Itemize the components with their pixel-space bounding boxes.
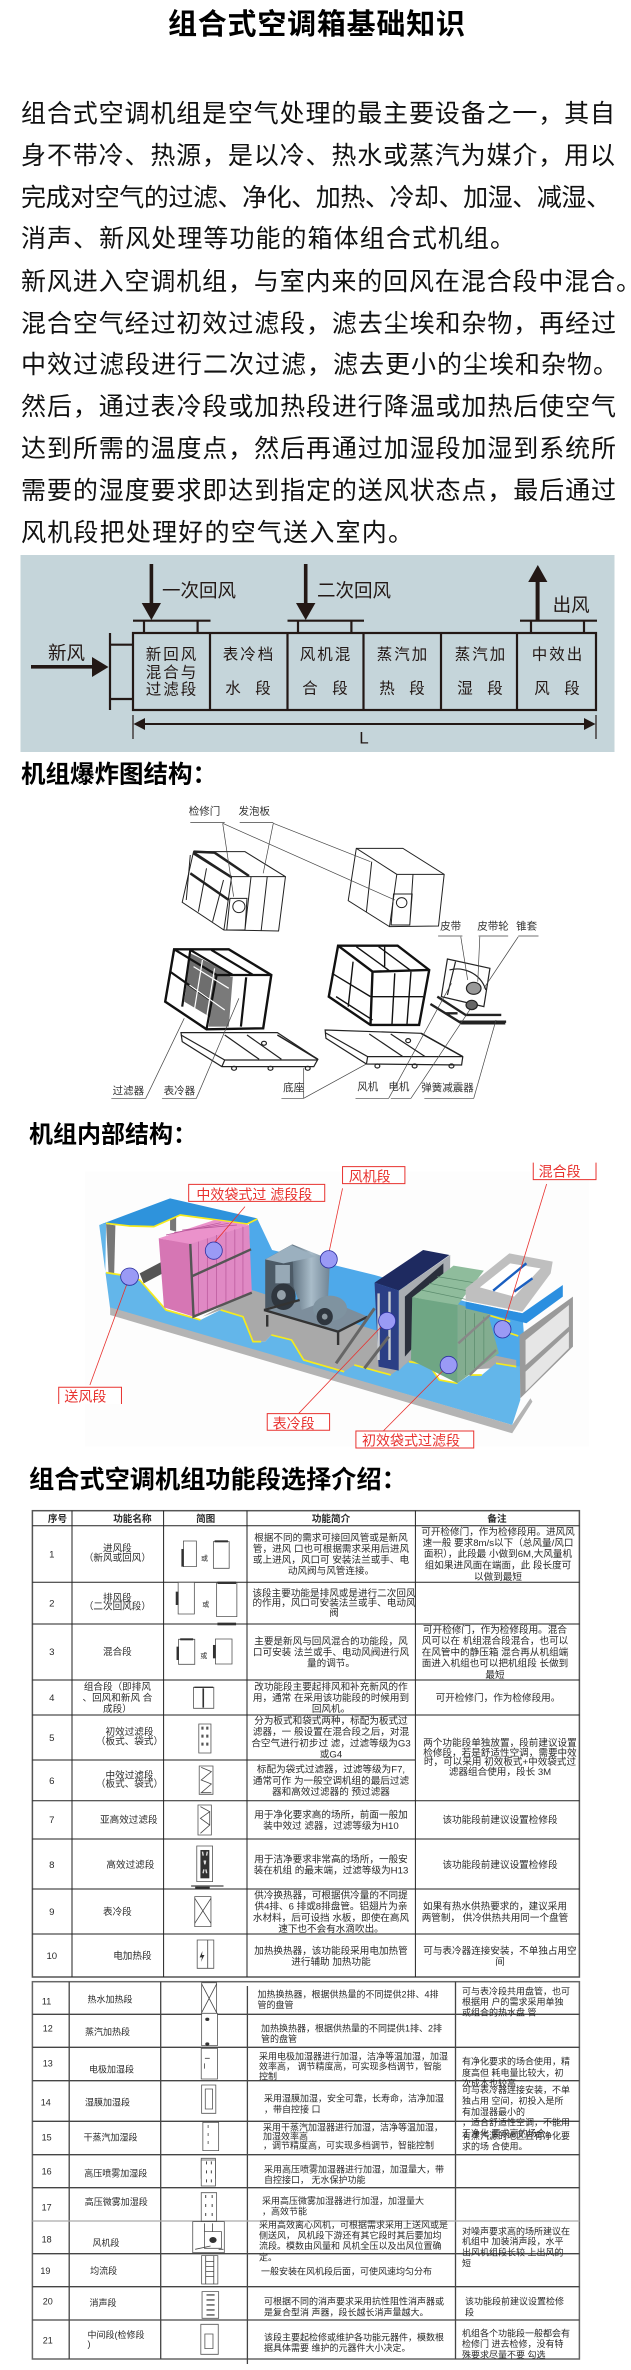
table text rows: 7 [49, 1815, 54, 1826]
panel: air handling section flow diagram: 二次回风 [317, 580, 391, 601]
table text rows: 是复合型消 声器，段长越长消声量越大。 [264, 2307, 429, 2318]
table text rows: 量的调节。 [307, 1658, 355, 1670]
table text rows: 滤器组合使用，段长 3M [449, 1766, 551, 1778]
table text rows: 出风机组段长较 上出风的 [462, 2247, 564, 2258]
table text rows: 采用干蒸汽加湿器进行加湿，洁净等温加湿， [263, 2122, 443, 2133]
diagram: internal structure cutaway [59, 1163, 596, 1449]
table text rows: 2 [49, 1598, 54, 1610]
table icons [201, 1983, 219, 2178]
table text rows: 求的场 合使用。 [462, 2141, 528, 2152]
table text rows: 控制 [259, 2071, 277, 2082]
base: left [181, 1033, 318, 1070]
diagram: exploded view of the unit: 发泡板 [239, 805, 271, 818]
rear left post [106, 1224, 115, 1273]
table text rows [40, 1986, 570, 2360]
table text rows: 3 [49, 1647, 54, 1658]
table text rows: 改功能段主要起排风和补充新风的作 [254, 1681, 408, 1693]
table text rows: 采用高压喷雾加湿器进行加湿，加湿量大，带 [264, 2163, 444, 2174]
diagram: internal structure cutaway: 送风段 [64, 1389, 106, 1405]
mixing section top [466, 1253, 563, 1323]
table text rows: 18 [42, 2234, 52, 2244]
table text rows: 或 [201, 1554, 208, 1562]
table text rows: 阀 [329, 1607, 339, 1619]
table text rows: 21 [43, 2335, 53, 2345]
table text rows: 器和高效过滤器的 预过滤器 [272, 1786, 390, 1798]
table text rows: 对噪声要求高的场所建议在 [462, 2225, 570, 2236]
table text rows: 间 [495, 1956, 505, 1968]
table text rows: 检修段，若是舒适性空调，需要中效 [423, 1747, 577, 1759]
text block: introduction: 组合式空调机组是空气处理的最主要设备之一，其自 [21, 100, 615, 128]
panel: air handling section flow diagram: 中效出 [532, 646, 584, 664]
text block: introduction: 然后，通过表冷段或加热段进行降温或加热后使空气 [21, 393, 616, 421]
fan section [263, 1244, 368, 1345]
green filter [411, 1266, 499, 1383]
table text rows: 采用电极加湿器进行加湿，洁净等温加湿，加湿 [259, 2050, 448, 2061]
table text rows: 功能简介 [312, 1513, 351, 1525]
table text rows: 标配为袋式过滤器，过滤等级为F7, [257, 1764, 405, 1776]
table text rows: 4 [49, 1693, 55, 1704]
table text rows: ，带自控接 口 [264, 2103, 321, 2114]
table text rows: 风机段 [92, 2237, 120, 2248]
table text rows: 供冷换热器，可根据供冷量的不同提 [254, 1890, 408, 1902]
table text rows: 最短 [485, 1669, 505, 1681]
text block: introduction: 消声、新风处理等功能的箱体组合式机组。 [21, 225, 515, 253]
table text rows: 面进入机组也可以把机组段 长做到 [422, 1658, 568, 1670]
diagram: internal structure cutaway: 中效袋式过 滤段段 [196, 1186, 312, 1202]
diagram: internal structure cutaway: 表冷段 [273, 1415, 315, 1431]
table text rows: ，适合舒适性空调，不能用 [462, 2117, 570, 2128]
table text rows: ，高效节能 [262, 2205, 307, 2216]
heading: internal structure: 机组内部结构： [29, 1122, 197, 1148]
table text rows: 机组各个功能段一般都会有 [462, 2327, 570, 2338]
leader lines [111, 823, 539, 1098]
table text rows: 面积），此段最 小做到6M,大风量机 [424, 1548, 572, 1560]
table text rows: 根据用 户的需求采用单独 [462, 1996, 564, 2007]
table text rows: 可根据不同的消声要求采用抗性阻性消声器或 [264, 2296, 444, 2307]
diagram: exploded view of the unit: 弹簧减震器 [421, 1081, 474, 1094]
dimension line L [133, 715, 596, 739]
text block: introduction: 完成对空气的过滤、净化、加热、冷却、加湿、减湿、 [21, 184, 611, 212]
table text rows: 或G4 [320, 1748, 343, 1760]
back wall and floor [202, 1218, 526, 1375]
fan assembly [430, 959, 506, 1023]
table text rows: 亚高效过滤段 [100, 1814, 158, 1826]
table text rows: 20 [43, 2297, 53, 2307]
table text rows: 加热换热器，根据供热量的不同提供1排、2排 [261, 2022, 442, 2033]
table text rows: 根据不同的需求可接回风管或是新风 [254, 1532, 408, 1544]
table text rows: 用，通常 在采用该功能段的时候用到 [253, 1692, 409, 1704]
panel: air handling section flow diagram: 蒸汽加 [377, 646, 429, 664]
table text rows: 高效过滤段 [106, 1859, 155, 1871]
table text rows: 供4排、6 排或8排盘管。铝翅片为亲 [255, 1900, 407, 1912]
table text rows: 侧送风， 风机段下游还有其它段时其后要加均 [259, 2229, 442, 2240]
table text rows: 自控接口， 无水保护功能 [264, 2174, 366, 2185]
table text rows: 装中效过 滤器，过滤等级为H10 [263, 1820, 399, 1832]
table text rows: 流段。模数由风量和 风机全压以及出风位置确 [259, 2240, 442, 2251]
text block: introduction: 达到所需的温度点，然后再通过加湿段加湿到系统所 [21, 435, 616, 463]
table text rows: 16 [42, 2167, 52, 2177]
table grid [32, 1982, 579, 2364]
diagram: exploded view of the unit: 皮带 [440, 920, 461, 933]
table text rows: 10 [46, 1951, 57, 1962]
pink filter [159, 1220, 252, 1317]
table text rows: 的作用，风口可安装法兰或手、电动风 [252, 1597, 416, 1609]
table text rows: 该功能段前建议设置检修段 [442, 1814, 558, 1826]
arrow: first return air [142, 564, 161, 620]
table text rows: 在风管中的静压箱 混合再从机组端 [422, 1646, 569, 1658]
table text rows: 殊要求尽量不要 勾选 [462, 2349, 546, 2360]
table text rows: 动风阀与风管连接。 [288, 1565, 374, 1577]
red leader lines [90, 1184, 547, 1432]
table text rows: 该段主要起检修或维护各功能元器件，模数根 [264, 2332, 444, 2343]
table text rows: 成段） [103, 1703, 132, 1715]
table text rows: 蒸汽加热段 [85, 2026, 130, 2037]
table text rows: 机组中 加装消声段，水平 [462, 2236, 564, 2247]
table text rows: 中间段(检修段 [88, 2329, 144, 2340]
table text rows: 速下也不会有水滴吹出。 [278, 1923, 384, 1935]
table text rows: 有加湿器最小的 [462, 2106, 525, 2117]
table text rows: 排风段 [103, 1592, 132, 1604]
table text rows: 管，进风 口也可根据需求采用后进风 [253, 1543, 409, 1555]
diagram: exploded view of the unit: 检修门 [189, 805, 220, 818]
table text rows: 速一般 要求8m/s以下（总风量/风口 [423, 1537, 573, 1549]
table text rows: 表冷段 [103, 1906, 132, 1918]
table text rows: 口可安装 法兰或手、电动风阀进行风 [253, 1646, 409, 1658]
table text rows: 19 [40, 2266, 50, 2276]
table text rows: 度高但 耗电量比较大，初 [462, 2067, 564, 2078]
panel: air handling section flow diagram: 新风 [48, 642, 85, 664]
table text rows: 管的盘管 [258, 1999, 294, 2010]
table text rows: 高压微雾加湿段 [85, 2196, 148, 2207]
table text rows: 分为板式和袋式两种，标配为板式过 [254, 1715, 408, 1727]
diagram: exploded view of the unit [111, 805, 539, 1098]
table text rows: 12 [43, 2023, 53, 2033]
diagram: exploded view of the unit: 电机 [388, 1080, 410, 1093]
arrow: fresh air [31, 657, 108, 677]
table text rows: 初效过滤段 [106, 1726, 154, 1738]
text block: introduction: 混合空气经过初效过滤段，滤去尘埃和杂物，再经过 [21, 310, 616, 338]
table text rows: 管的盘管 [261, 2033, 297, 2044]
diagram: exploded view of the unit: 风机 [357, 1080, 379, 1093]
table text rows: 或 [202, 1600, 209, 1608]
table text rows: 加热换热器，该功能段采用电加热管 [254, 1945, 408, 1957]
table text rows: 或 [200, 1651, 207, 1660]
panel: air handling section flow diagram: 表冷档 [223, 646, 275, 664]
table text rows: 通常可作 为一般空调机组的最后过滤 [253, 1775, 409, 1787]
arrow: outlet air [528, 565, 547, 621]
diagram: exploded view of the unit: 过滤器 [113, 1084, 145, 1097]
panel: air handling section flow diagram: 合 段 [302, 680, 350, 698]
heading: function section table: 组合式空调机组功能段选择介绍： [29, 1465, 407, 1494]
diagram: exploded view of the unit: 皮带轮 [477, 920, 509, 933]
table text rows: 该功能段前建议设置检修段 [442, 1859, 558, 1871]
table text rows: 水材料，后可设挡 水板，即使在高风 [253, 1912, 409, 1924]
table text rows: 进行辅助 加热功能 [291, 1956, 371, 1968]
panel: air handling section flow diagram: 一次回风 [162, 580, 236, 601]
table text rows: 采用高压微雾加湿器进行加湿，加湿量大 [262, 2195, 424, 2206]
text block: introduction: 身不带冷、热源，是以冷、热水或蒸汽为媒介，用以 [21, 142, 615, 170]
table text rows: 时，可以采用 初效板式+中效袋式过 [424, 1756, 576, 1768]
table text rows: 高压喷雾加湿段 [84, 2167, 147, 2178]
panel: air handling section flow diagram: 水 段 [225, 680, 273, 698]
roof [99, 1198, 257, 1227]
table text rows: 据具体需要 维护的元器件大小决定。 [264, 2342, 411, 2353]
table text rows: 进风段 [103, 1542, 132, 1554]
table text rows: ，调节精度高，可实现多档调节，智能控制 [263, 2140, 434, 2151]
table text rows: 短 [462, 2257, 471, 2268]
panel: air handling section flow diagram: 出风 [553, 594, 590, 616]
panel: air handling section flow diagram: 混合与 [146, 664, 198, 682]
text block: introduction [21, 100, 631, 547]
housing: upper left panels [182, 852, 285, 931]
table text rows: 热水加热段 [87, 1993, 133, 2004]
table text rows: 混合段 [103, 1646, 132, 1658]
diagram: internal structure cutaway: 风机段 [349, 1169, 391, 1185]
label boxes [59, 1163, 596, 1448]
table text rows: 干蒸汽加湿段 [83, 2131, 138, 2142]
table text rows: 加热换热器，根据供热量的不同提供2排、4排 [258, 1988, 439, 1999]
panel: air handling section flow diagram: 风机混 [300, 646, 352, 664]
table text rows: 定。 [259, 2252, 277, 2263]
table text rows: 功能名称 [113, 1513, 152, 1525]
diagram: exploded view of the unit: 底座 [283, 1081, 304, 1094]
table text rows: 风可以在 机组混合段混合，也可以 [422, 1635, 569, 1647]
table text rows: 该段主要功能是排风或是进行二次回风 [252, 1588, 416, 1600]
panel: air handling section flow diagram: 风 段 [534, 680, 582, 698]
table text rows: 滤器，一 般设置在混合段之后，对混 [253, 1726, 409, 1738]
panel: air handling section flow diagram: 新回风 [146, 646, 198, 664]
table grid [32, 1511, 579, 1977]
base: right [325, 1030, 463, 1068]
table icons [176, 1540, 237, 1753]
table text rows: 两管制， 供冷供热共用同一个盘管 [422, 1912, 569, 1924]
diagram: exploded view of the unit: 表冷器 [164, 1084, 196, 1097]
table text rows: 一般安装在风机段后面，可使风速均匀分布 [261, 2266, 432, 2277]
table text rows: 可开检修门，作为检修段用。进风风 [421, 1526, 575, 1538]
table text rows: 序号 [48, 1513, 67, 1525]
table text rows: 6 [49, 1776, 54, 1787]
table text rows: 加湿效率高 [263, 2131, 308, 2142]
table text rows: 8 [49, 1860, 54, 1871]
cooling coil section [336, 1250, 450, 1371]
table text rows: 次成本也较高 [462, 2077, 516, 2088]
table text rows: ) [88, 2339, 90, 2349]
table text rows: 5 [49, 1733, 54, 1744]
panel: air handling section flow diagram: 过滤段 [146, 680, 198, 698]
table text rows: 有净化要求的场合使用，精 [462, 2056, 570, 2067]
table text rows: （板式、袋式） [96, 1736, 163, 1748]
table text rows: 可开检修门，作为检修段用。混合 [423, 1624, 567, 1636]
table text rows: 采用湿膜加湿，安全可靠，长寿命，洁净加湿 [264, 2093, 444, 2104]
table text rows: 或上进风，风口可 安装法兰或手、电 [253, 1554, 409, 1566]
table text rows: 以做到最短 [474, 1571, 522, 1583]
table text rows: 中效过滤段 [106, 1770, 154, 1782]
table text rows: 组合段（即排风 [84, 1681, 151, 1693]
table text rows: 独占用 空间，初投入是所 [462, 2095, 564, 2106]
table text rows: 该功能段前建议设置检修 [465, 2296, 564, 2307]
table text rows: 13 [43, 2058, 53, 2068]
table text rows: 均流段 [90, 2265, 117, 2276]
table text rows: 或组合的热水盘 管 [462, 2007, 537, 2018]
table text rows: 消声段 [89, 2297, 117, 2308]
text block: introduction: 新风进入空调机组，与室内来的回风在混合段中混合。 [21, 268, 631, 296]
table text rows: 备注 [487, 1513, 507, 1525]
table text rows: 有蒸汽源的地区且有净化要 [462, 2130, 570, 2141]
table text rows: 可开检修门，作为检修段用。 [436, 1692, 560, 1704]
table text rows: 检修门 进去检修，没有特 [462, 2338, 564, 2349]
heading: exploded view: 机组爆炸图结构： [21, 760, 217, 788]
table text rows: 可与表冷器连接安装，不单独占用空 [423, 1945, 577, 1957]
base rail [110, 1307, 532, 1433]
table text rows: 、回风和新风 合 [82, 1692, 153, 1704]
table text rows: 15 [42, 2132, 52, 2142]
table text rows: 17 [42, 2203, 52, 2213]
table text rows: 电极加湿段 [89, 2063, 134, 2074]
title: 组合式空调箱基础知识 [168, 8, 465, 41]
table text rows: 9 [49, 1907, 54, 1918]
panel: air handling section flow diagram: 热 段 [379, 680, 427, 698]
table text rows: 组如果进风面在端面，此 段长度可 [425, 1560, 572, 1572]
diagram: exploded view of the unit: 锥套 [516, 920, 538, 933]
table text rows: 主要是新风与回风混合的功能段，风 [254, 1636, 408, 1648]
panel: air handling section flow diagram: 湿 段 [457, 680, 505, 698]
table text rows: 简图 [196, 1513, 215, 1525]
table text rows: 两个功能段单独放置，段前建议设置 [423, 1737, 577, 1749]
table text rows [46, 1513, 577, 1968]
table text rows: 采用高效离心风机，可根据需求采用上送风或是 [259, 2219, 448, 2230]
panel: air handling section flow diagram: 蒸汽加 [455, 646, 507, 664]
table text rows: （板式、袋式） [96, 1778, 163, 1790]
front panel [99, 1223, 520, 1425]
table: function sections 11-21 [32, 1982, 579, 2364]
table text rows: 回风机。 [312, 1703, 350, 1715]
housing: upper right panels [348, 848, 444, 927]
panel: air handling section flow diagram: L [359, 728, 369, 748]
table text rows: 合空气进行初步过 滤，过滤等级为G3 [251, 1738, 411, 1750]
table text rows: 如果有热水供热要求的，建议采用 [423, 1900, 567, 1912]
table text rows: 段 [465, 2307, 474, 2318]
text block: introduction: 需要的湿度要求即达到指定的送风状态点，最后通过 [21, 477, 616, 505]
table text rows: 电加热段 [113, 1950, 152, 1962]
frame: lower left with filters [165, 949, 271, 1029]
end damper [519, 1297, 573, 1398]
panel: air handling section flow diagram [20, 555, 614, 752]
table text rows: 于净化 要求高的场合。 [462, 2127, 555, 2138]
frame: lower right [329, 946, 429, 1025]
table text rows: （二次回风段） [84, 1600, 151, 1612]
table text rows: 11 [42, 1997, 51, 2007]
arrow: second return air [296, 564, 315, 620]
table text rows: 可与表冷段共用盘管，也可 [462, 1986, 570, 1997]
table text rows: 用于净化要求高的场所，前面一般加 [254, 1809, 408, 1821]
marker dots [121, 1242, 511, 1374]
table: function sections 1-10 [32, 1511, 579, 1977]
table text rows: 1 [49, 1550, 54, 1560]
diagram: internal structure cutaway: 混合段 [539, 1164, 581, 1180]
table text rows: 湿膜加湿段 [85, 2096, 130, 2107]
text block: introduction: 风机段把处理好的空气送入室内。 [21, 519, 413, 547]
table text rows: 装在机组 的最末端，过滤等级为H13 [254, 1864, 408, 1876]
table text rows: 可与表冷器连接安装，不单 [462, 2084, 570, 2095]
table text rows: 效率高， 调节精度高，可实现多档调节，智能 [259, 2061, 442, 2072]
text block: introduction: 中效过滤段进行二次过滤，滤去更小的尘埃和杂物。 [21, 351, 618, 379]
table text rows: （新风或回风） [84, 1552, 151, 1564]
yellow seal lines [106, 1215, 518, 1383]
table text rows: 14 [41, 2098, 51, 2108]
table text rows: 用于洁净要求非常高的场所，一般安 [254, 1854, 408, 1866]
diagram: internal structure cutaway: 初效袋式过滤段 [362, 1433, 460, 1449]
